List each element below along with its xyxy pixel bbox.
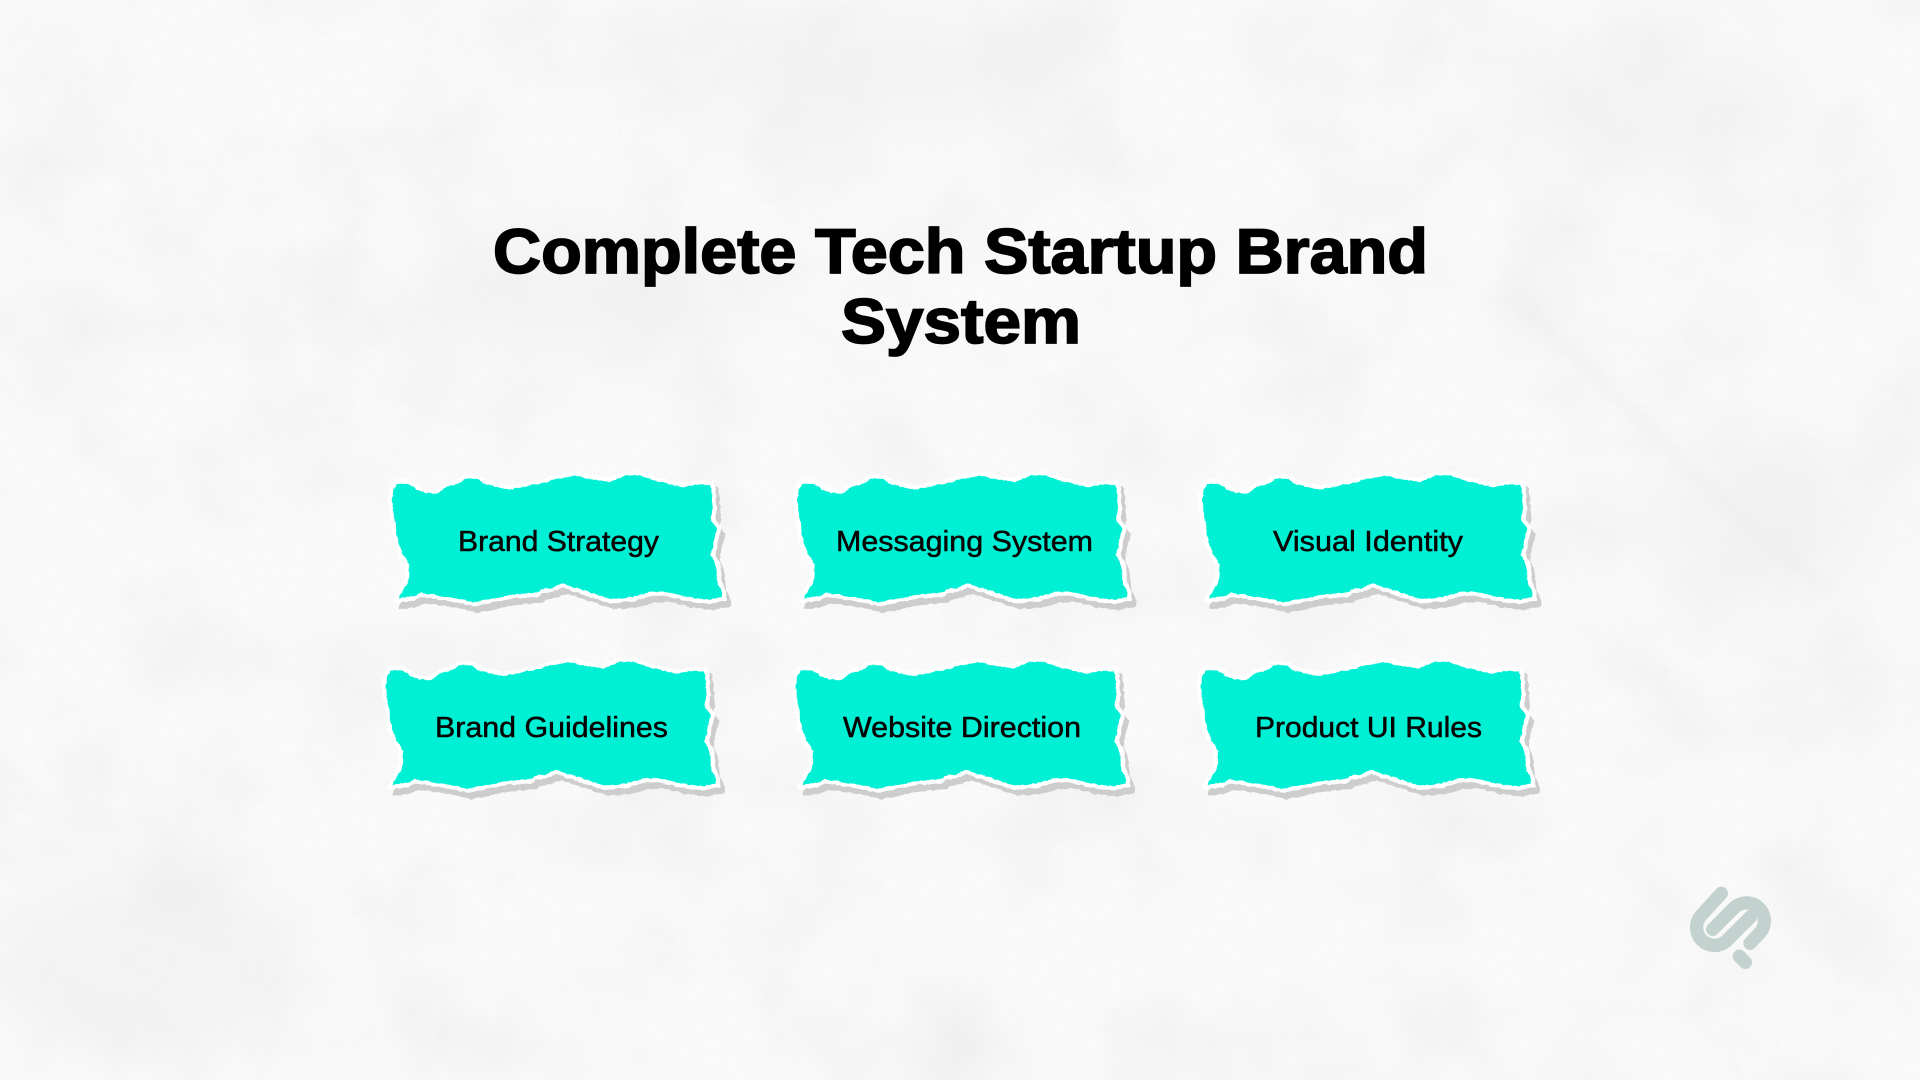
card: Brand Strategy <box>390 473 729 611</box>
card: Brand Strategy: Brand Strategy <box>458 526 660 558</box>
card: Brand Guidelines: Brand Guidelines <box>435 712 668 744</box>
card: Visual Identity: Visual Identity <box>1273 526 1464 558</box>
icon: logo mark <box>1697 893 1764 962</box>
title <box>493 217 1428 357</box>
card: Visual Identity <box>1200 473 1540 611</box>
card: Messaging System <box>796 473 1134 611</box>
card: Product UI Rules: Product UI Rules <box>1255 712 1482 744</box>
title: System <box>841 287 1081 357</box>
card: Product UI Rules <box>1199 660 1538 797</box>
card: Website Direction <box>794 660 1133 797</box>
card: Brand Guidelines <box>384 660 723 797</box>
title: Complete Tech Startup Brand <box>493 217 1428 287</box>
card: Website Direction: Website Direction <box>843 712 1081 744</box>
card: Messaging System: Messaging System <box>836 526 1093 558</box>
